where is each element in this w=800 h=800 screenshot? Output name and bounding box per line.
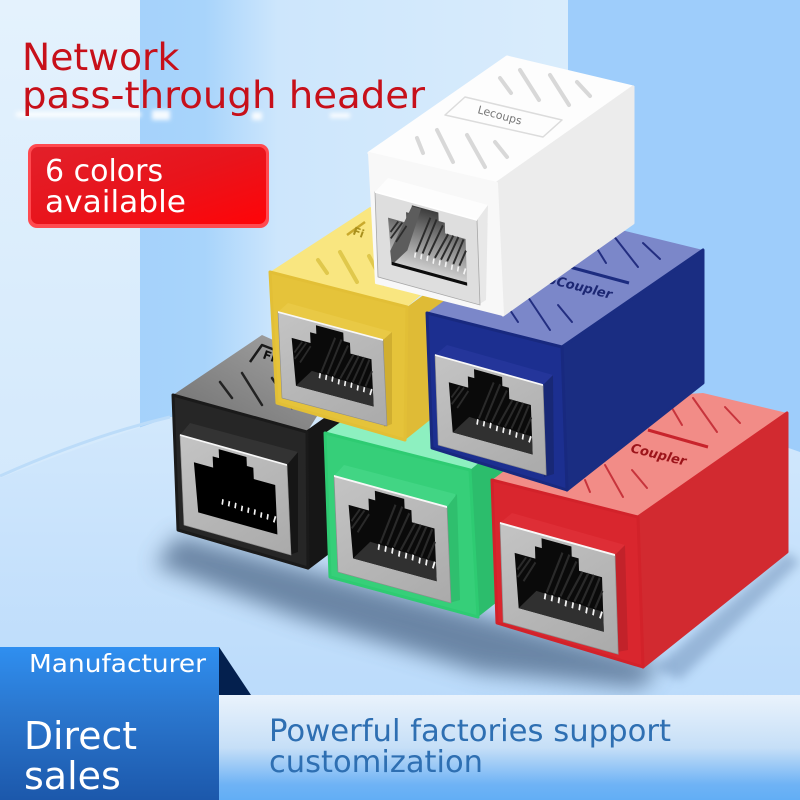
manufacturer panel [0, 647, 251, 800]
connector: black [173, 335, 345, 568]
connector: white [369, 57, 633, 315]
connector: red: Coupler [629, 441, 689, 470]
connector: yellow [270, 207, 480, 440]
title: pass-through header [22, 73, 426, 117]
manufacturer panel: Manufacturer [29, 649, 207, 678]
strip text: Powerful factories support [269, 714, 671, 749]
title [22, 35, 426, 117]
badge: 6 colors available [28, 144, 269, 228]
manufacturer panel: sales [24, 754, 121, 798]
reflections under title [16, 110, 350, 120]
shadow under connectors [155, 535, 800, 688]
strip text line 2: customization [269, 745, 483, 780]
badge: 6 colors available: 6 colors [45, 154, 163, 189]
bottom strip [219, 695, 800, 800]
connector: green [325, 380, 525, 617]
connector: blue: 5Coupler [546, 272, 615, 303]
connector: blue [427, 228, 703, 490]
connector: red [492, 393, 787, 667]
connector: black: Fi [261, 348, 277, 365]
manufacturer panel: Direct [24, 714, 137, 758]
badge: 6 colors available: available [45, 185, 186, 220]
connector: yellow: Fi [351, 225, 366, 241]
title: Network [22, 35, 180, 79]
connector: white: Lecoups [476, 103, 523, 128]
